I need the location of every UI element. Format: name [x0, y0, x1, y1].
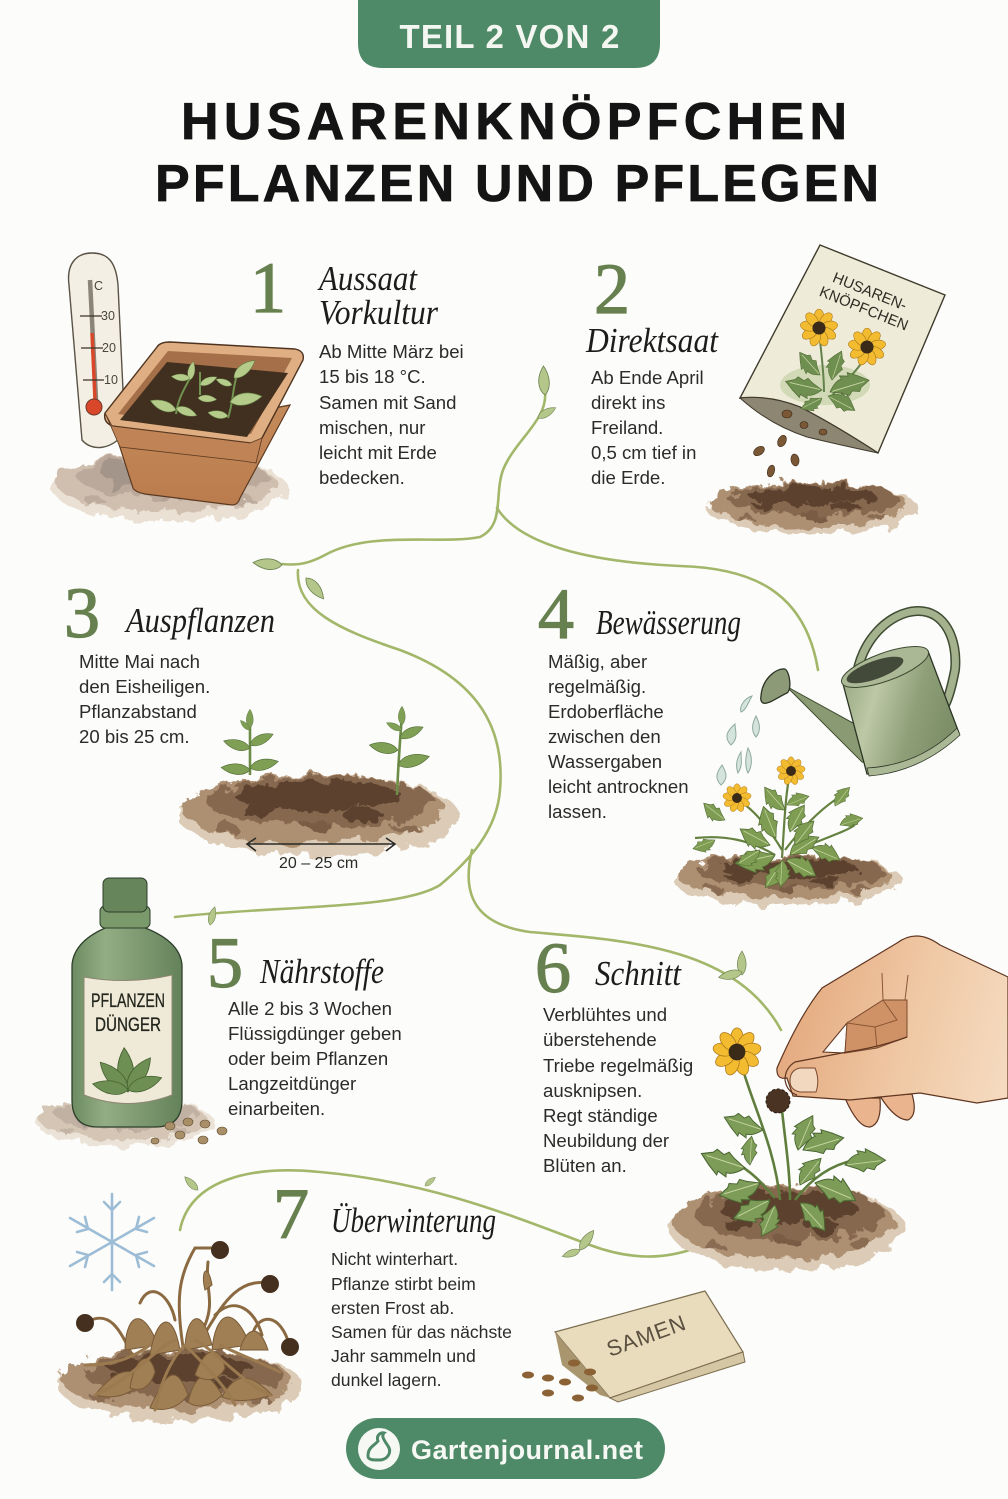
seedling right — [368, 706, 431, 795]
icon: seed packet: KNÖPFCHEN — [817, 282, 911, 334]
icon: watering can — [717, 611, 960, 785]
text 6: Neubildung der — [543, 1130, 669, 1151]
text 4: Wassergaben — [548, 751, 662, 772]
spent flower head — [766, 1089, 790, 1113]
icon: thermometer — [69, 253, 125, 448]
icon: fertilizer bottle: DÜNGER — [95, 1015, 161, 1036]
text 7 — [331, 1249, 512, 1390]
text 7: Pflanze stirbt beim — [331, 1274, 476, 1294]
icon: thermometer: 10 — [104, 373, 118, 387]
title: HUSARENKNÖPFCHEN — [181, 93, 847, 151]
seedling left — [220, 709, 279, 777]
icon: hand — [777, 936, 1008, 1127]
text 2: Freiland. — [591, 417, 663, 438]
text 3: Mitte Mai nach — [79, 651, 200, 672]
icon: terracotta pot with seedlings — [105, 342, 303, 505]
title — [155, 93, 879, 213]
title: PFLANZEN UND PFLEGEN — [155, 155, 879, 213]
header badge — [358, 0, 660, 68]
icon: thermometer: C — [94, 279, 103, 293]
heading 3: Auspflanzen — [124, 601, 275, 640]
number 4: 4 — [538, 574, 574, 654]
soil under bottle — [36, 1098, 214, 1146]
text 6: Triebe regelmäßig — [543, 1055, 693, 1076]
text 5: Flüssigdünger geben — [228, 1023, 402, 1044]
flowering plant 4 — [691, 757, 864, 893]
text 2: die Erde. — [591, 467, 665, 488]
seeds — [522, 1360, 598, 1402]
number 1: 1 — [250, 248, 286, 328]
text 2: Ab Ende April — [591, 367, 704, 388]
soil mound 7 — [58, 1349, 302, 1421]
icon: snowflake — [70, 1194, 154, 1290]
text 6: Regt ständige — [543, 1105, 658, 1126]
heading 1 — [317, 259, 438, 332]
number 6: 6 — [535, 928, 571, 1008]
soil mound 6 — [670, 1185, 904, 1271]
heading 7: Überwinterung — [331, 1201, 496, 1240]
step 5: Nährstoffe — [36, 878, 402, 1146]
number 7: 7 — [273, 1174, 309, 1254]
text 3: 20 bis 25 cm. — [79, 726, 190, 747]
text 1: mischen, nur — [319, 417, 425, 438]
icon: seed envelope: SAMEN — [603, 1310, 689, 1362]
step 6: Schnitt — [535, 928, 1008, 1271]
text 6: ausknipsen. — [543, 1080, 642, 1101]
icon: seed envelope — [522, 1291, 745, 1402]
text 4: regelmäßig. — [548, 676, 646, 697]
text 5 — [228, 998, 402, 1119]
text 3: Pflanzabstand — [79, 701, 197, 722]
text 1: leicht mit Erde — [319, 442, 437, 463]
text 7: Nicht winterhart. — [331, 1249, 458, 1269]
withered plant — [76, 1241, 299, 1410]
heading 6: Schnitt — [595, 954, 682, 993]
number 5: 5 — [207, 923, 243, 1003]
heading 4: Bewässerung — [596, 603, 741, 642]
text 4: leicht antrocknen — [548, 776, 689, 797]
text 6: Verblühtes und — [543, 1004, 667, 1025]
soil mound 4 — [673, 854, 903, 906]
number 2: 2 — [594, 249, 630, 329]
water drops — [717, 696, 759, 785]
icon: fertilizer bottle — [72, 878, 227, 1144]
step 7: Überwinterung — [58, 1174, 745, 1421]
step 1: Aussaat Vorkultur — [52, 248, 464, 522]
icon: seed packet: HUSAREN- — [830, 269, 909, 314]
soil mound — [706, 482, 918, 534]
text 7: Samen für das nächste — [331, 1322, 512, 1342]
text 4: Erdoberfläche — [548, 701, 664, 722]
text 7: dunkel lagern. — [331, 1370, 442, 1390]
text 2: direkt ins — [591, 392, 665, 413]
text 1: Ab Mitte März bei — [319, 341, 464, 362]
text 2: 0,5 cm tief in — [591, 442, 696, 463]
icon: thermometer: 20 — [102, 341, 116, 355]
heading 2: Direktsaat — [585, 321, 719, 360]
number 3: 3 — [64, 573, 100, 653]
step 4: Bewässerung — [538, 574, 960, 906]
text 5: Langzeitdünger — [228, 1073, 356, 1094]
text 4: Mäßig, aber — [548, 651, 647, 672]
text 3: den Eisheiligen. — [79, 676, 210, 697]
footer badge: Gartenjournal.net — [411, 1435, 643, 1465]
heading 1: Vorkultur — [319, 293, 438, 332]
text 6 — [543, 1004, 693, 1176]
text 1 — [319, 341, 464, 488]
text 4: lassen. — [548, 801, 607, 822]
falling seeds — [752, 410, 827, 478]
header badge: TEIL 2 VON 2 — [399, 18, 621, 55]
text 7: ersten Frost ab. — [331, 1298, 454, 1318]
text 6: überstehende — [543, 1029, 657, 1050]
flowering plant 6 — [696, 1028, 886, 1241]
text 4 — [548, 651, 689, 822]
text 1: bedecken. — [319, 467, 405, 488]
step 3: Auspflanzen — [64, 573, 459, 872]
icon: seed packet — [740, 245, 945, 478]
logo — [358, 1428, 400, 1470]
soil bed — [177, 774, 459, 856]
soil under pot — [52, 454, 288, 522]
heading 5: Nährstoffe — [259, 952, 384, 991]
text 1: 15 bis 18 °C. — [319, 366, 426, 387]
granules — [151, 1118, 227, 1144]
spacing arrow — [247, 838, 395, 872]
step 2: Direktsaat — [585, 245, 945, 534]
spacing arrow: 20 – 25 cm — [279, 855, 358, 872]
text 5: Alle 2 bis 3 Wochen — [228, 998, 392, 1019]
connecting vines — [175, 366, 818, 1259]
text 7: Jahr sammeln und — [331, 1346, 476, 1366]
icon: thermometer: 30 — [101, 309, 115, 323]
heading 1: Aussaat — [317, 259, 418, 298]
text 2 — [591, 367, 704, 488]
footer badge — [346, 1418, 665, 1479]
text 4: zwischen den — [548, 726, 661, 747]
text 5: oder beim Pflanzen — [228, 1048, 388, 1069]
icon: fertilizer bottle: PFLANZEN — [91, 991, 165, 1012]
text 3 — [79, 651, 210, 747]
text 6: Blüten an. — [543, 1155, 627, 1176]
text 1: Samen mit Sand — [319, 392, 456, 413]
text 5: einarbeiten. — [228, 1098, 325, 1119]
